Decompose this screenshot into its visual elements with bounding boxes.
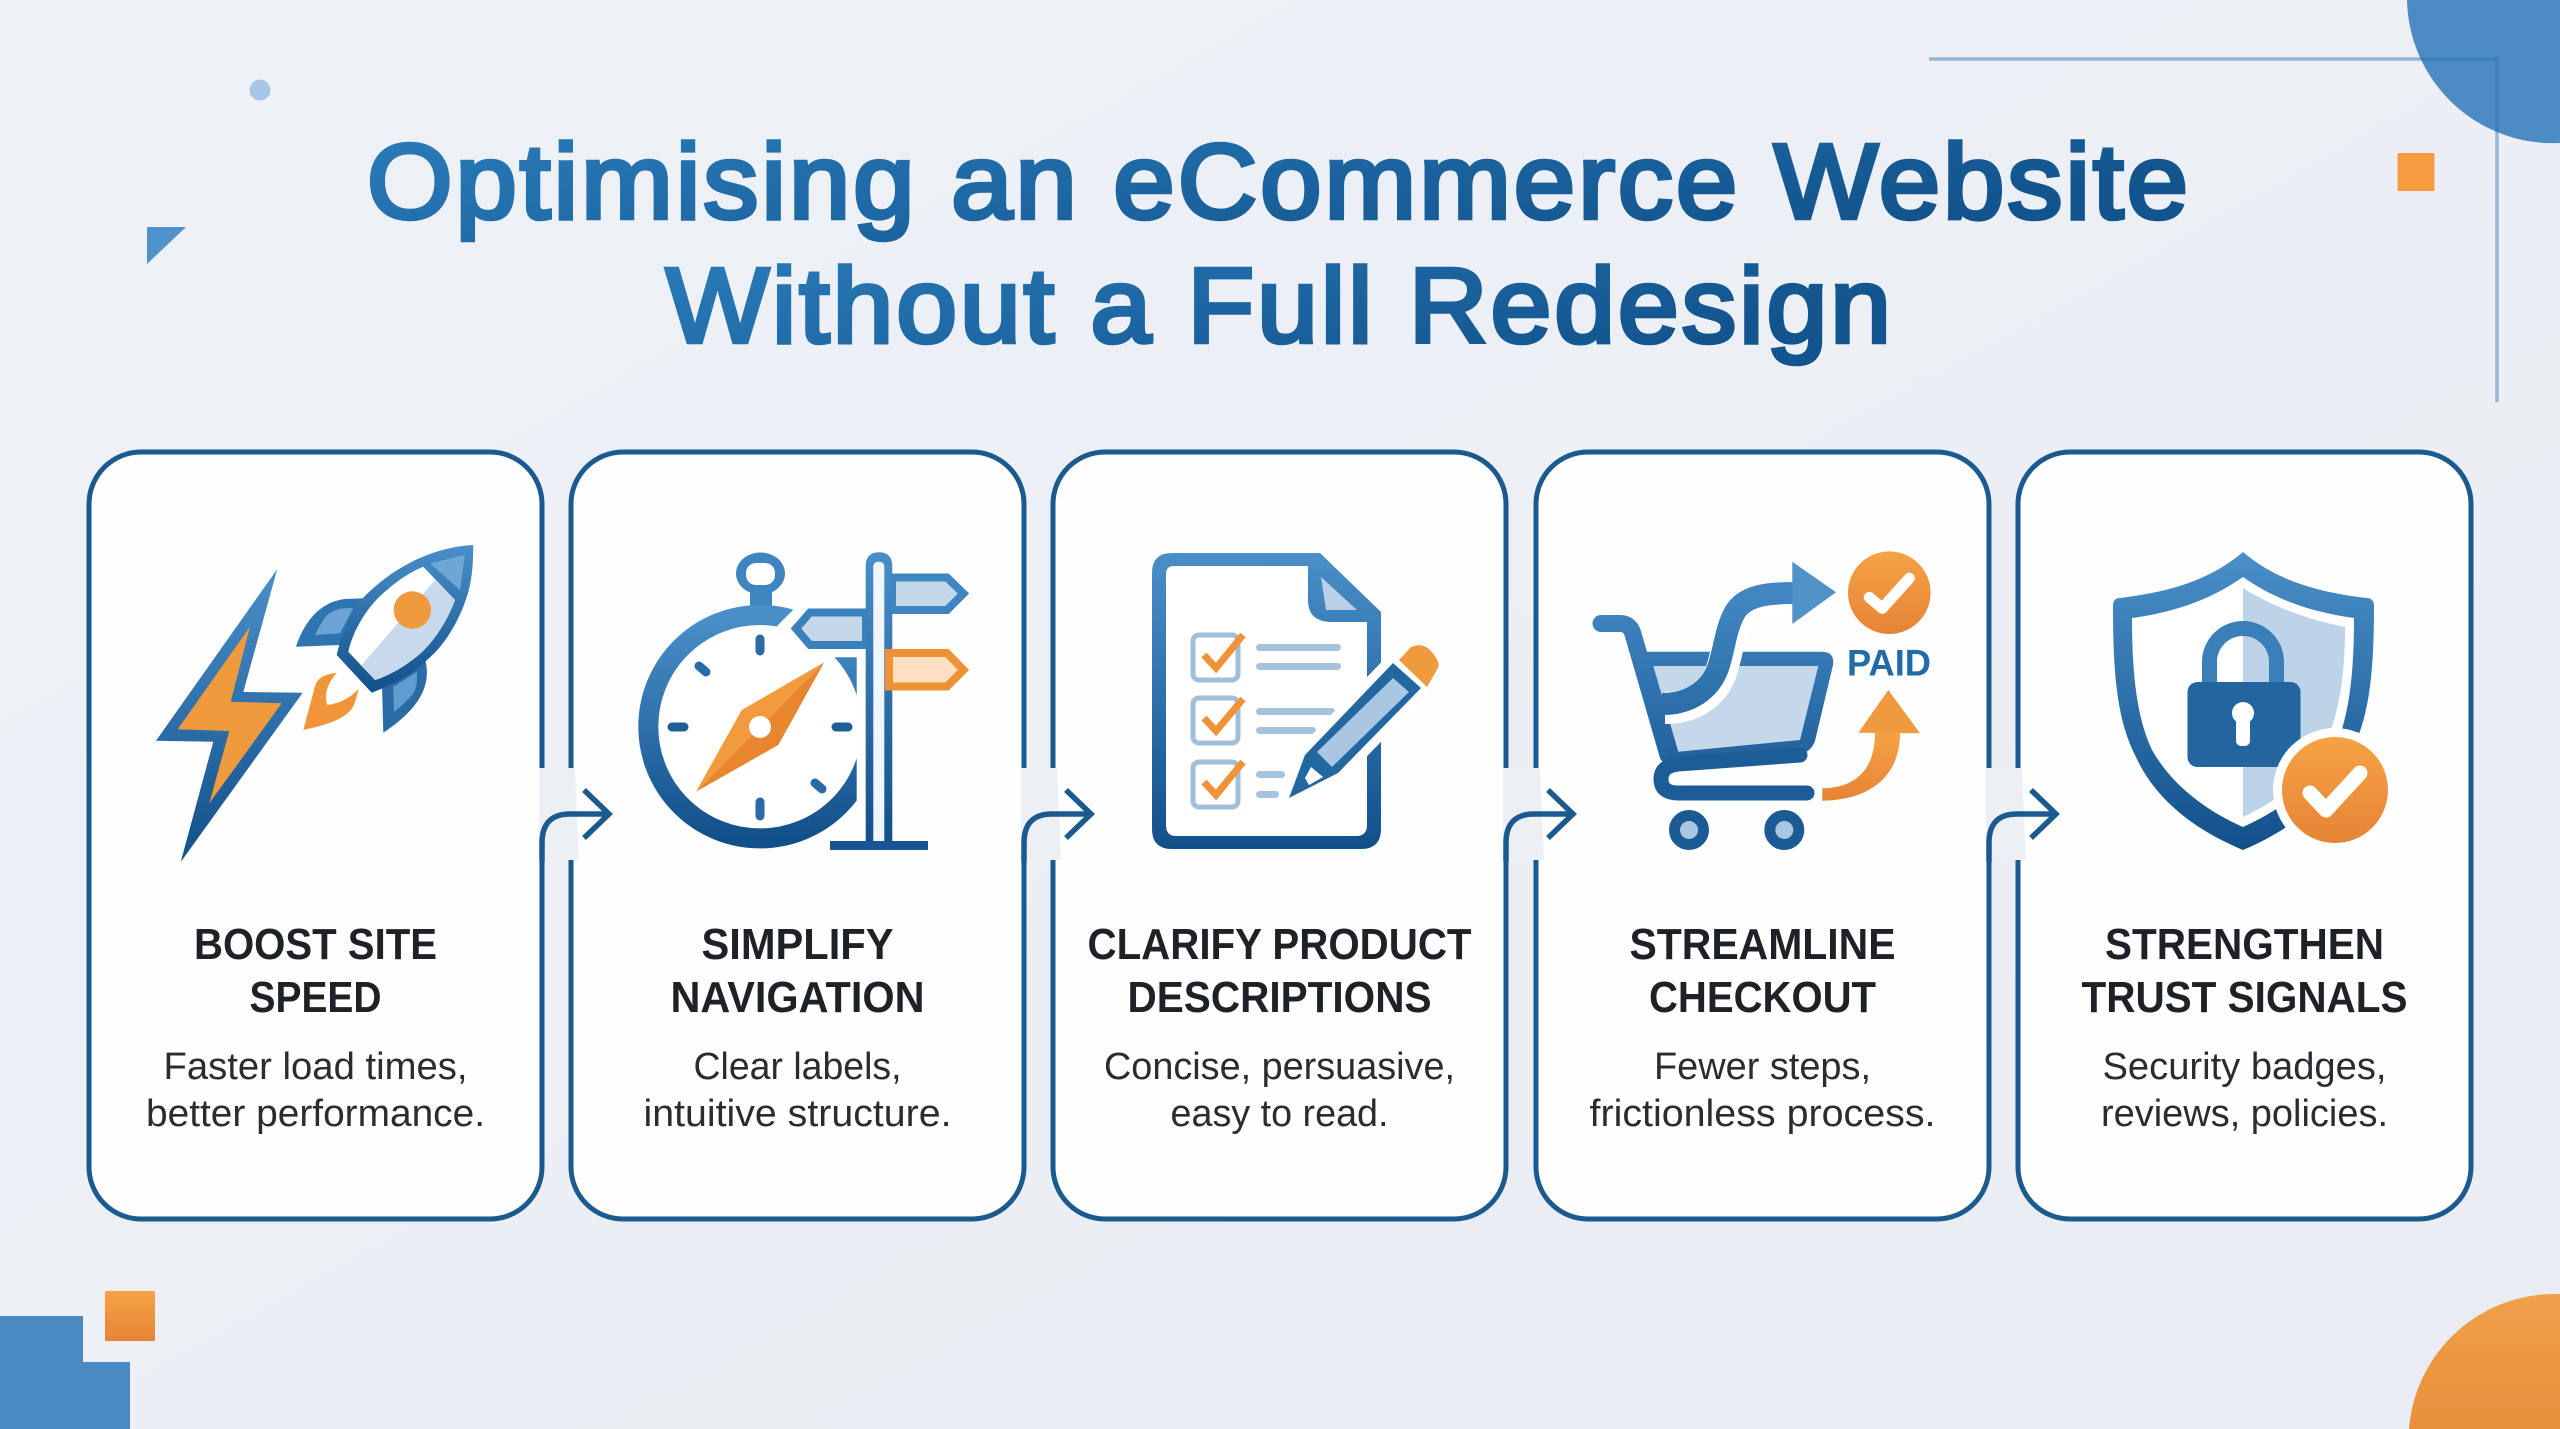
description	[2101, 1046, 2388, 1135]
description: reviews, policies.	[2101, 1093, 2388, 1135]
arrow: step 4 to step 5	[1986, 768, 2056, 862]
heading: SPEED	[250, 973, 382, 1022]
description: Security badges,	[2102, 1046, 2386, 1088]
decoration: bottom-right orange circle	[2409, 1294, 2560, 1429]
arrow: step 2 to step 3	[1021, 768, 1091, 862]
arrow: step 3 to step 4	[1503, 768, 1573, 862]
icon: lightning bolt and rocket	[156, 545, 473, 862]
decoration: top-right blue circle	[2407, 0, 2560, 143]
description	[146, 1046, 485, 1135]
description	[644, 1046, 952, 1135]
heading	[1630, 920, 1896, 1022]
panel: clarify product descriptions	[1053, 452, 1506, 1219]
title	[367, 123, 2191, 365]
icon: shopping cart paid: PAID	[1847, 642, 1931, 684]
icon: stopwatch compass and signpost	[648, 552, 964, 850]
heading	[194, 920, 437, 1022]
heading	[2082, 920, 2408, 1022]
decoration: bottom-left orange square	[105, 1291, 155, 1341]
heading: STRENGTHEN	[2105, 920, 2384, 969]
description: Fewer steps,	[1654, 1046, 1871, 1088]
heading	[1088, 920, 1472, 1022]
description	[1104, 1046, 1455, 1135]
heading: SIMPLIFY	[702, 920, 894, 969]
decoration: top-right corner line	[1929, 59, 2497, 402]
panel: streamline checkout	[1536, 452, 1989, 1219]
icon: shopping cart paid	[1601, 551, 1931, 844]
arrow: step 1 to step 2	[539, 768, 609, 862]
description: intuitive structure.	[644, 1093, 952, 1135]
heading: BOOST SITE	[194, 920, 437, 969]
description: easy to read.	[1170, 1093, 1388, 1135]
description: Clear labels,	[694, 1046, 902, 1088]
icon: shield padlock and check badge	[2113, 552, 2397, 852]
description: Faster load times,	[164, 1046, 468, 1088]
heading: NAVIGATION	[670, 973, 924, 1022]
decoration: top-right orange square	[2398, 153, 2434, 191]
icon: checklist document and pencil	[1152, 553, 1439, 849]
description: Concise, persuasive,	[1104, 1046, 1455, 1088]
heading: CHECKOUT	[1649, 973, 1876, 1022]
panel: strengthen trust signals	[2018, 452, 2471, 1219]
heading: DESCRIPTIONS	[1128, 973, 1432, 1022]
heading: TRUST SIGNALS	[2082, 973, 2408, 1022]
decoration: bottom-left blue steps	[0, 1316, 130, 1429]
heading	[670, 920, 924, 1022]
description: better performance.	[146, 1093, 485, 1135]
heading: CLARIFY PRODUCT	[1088, 920, 1472, 969]
panel: boost site speed	[89, 452, 542, 1219]
description	[1590, 1046, 1936, 1135]
decoration: top-left dot	[250, 80, 270, 100]
description: frictionless process.	[1590, 1093, 1936, 1135]
decoration: top-left triangle	[147, 227, 186, 264]
title: Optimising an eCommerce Website	[367, 123, 2191, 241]
panel: simplify navigation	[571, 452, 1024, 1219]
title: Without a Full Redesign	[666, 247, 1894, 365]
heading: STREAMLINE	[1630, 920, 1896, 969]
